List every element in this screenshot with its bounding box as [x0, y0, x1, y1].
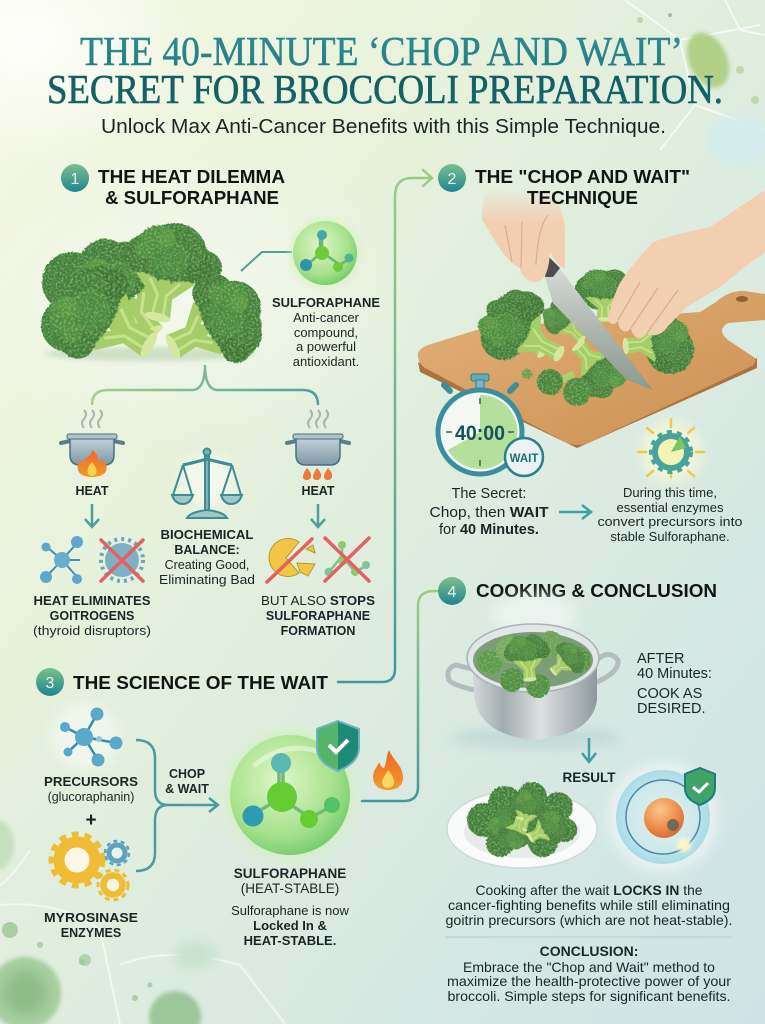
text: myrosinase enzymes: MYROSINASE	[44, 911, 138, 925]
heading 4	[438, 577, 717, 605]
heading 2: 2	[448, 171, 457, 188]
text: the secret: The Secret:	[452, 486, 526, 502]
knife	[545, 256, 653, 390]
panel: heat dilemma	[33, 164, 380, 638]
text: precursors: PRECURSORS	[44, 775, 138, 789]
text: the secret: Chop, then WAIT	[430, 505, 549, 521]
heading 1: & SULFORAPHANE	[105, 188, 279, 208]
plate of broccoli	[447, 782, 597, 868]
arrow: heat to goitrogens	[85, 504, 99, 527]
text: heat eliminates goitrogens	[33, 594, 151, 638]
icon: enzyme gears	[51, 834, 129, 900]
text: enzymes convert	[598, 485, 742, 544]
text: after 40 minutes: COOK AS	[637, 686, 702, 702]
text: sulforaphane heat-stable: HEAT-STABLE.	[244, 933, 336, 948]
text: sulforaphane heat-stable: SULFORAPHANE	[234, 866, 346, 881]
title	[47, 28, 723, 112]
chopped broccoli	[469, 270, 694, 408]
text: sulforaphane definition	[272, 296, 380, 369]
icon: precursor molecule	[51, 703, 122, 771]
text: conclusion: broccoli. Simple steps for significant benefits.	[448, 988, 730, 1004]
label: heat right: HEAT	[301, 484, 335, 498]
text: sulforaphane definition: compound,	[294, 325, 358, 340]
text: sulforaphane definition: Anti-cancer	[293, 310, 360, 325]
icon: crossed-out molecule	[324, 538, 370, 581]
text: sulforaphane heat-stable: Locked In &	[253, 918, 327, 933]
text: heat eliminates goitrogens: (thyroid disruptors)	[33, 624, 151, 638]
text: myrosinase enzymes: ENZYMES	[61, 926, 121, 940]
icon: protected cell	[608, 762, 718, 872]
bracket: combine arrow	[136, 740, 218, 871]
text: after 40 minutes: 40 Minutes:	[637, 666, 712, 682]
icon: crossed-out virus	[101, 539, 143, 581]
text: precursors	[44, 775, 138, 804]
text: biochemical balance: BALANCE:	[174, 543, 240, 557]
icon: sulforaphane sphere	[285, 213, 365, 293]
text: enzymes convert: During this time,	[623, 485, 717, 500]
icon: crossed-out enzyme	[267, 538, 315, 582]
icon: goitrogen molecule	[40, 536, 83, 584]
text: locks in: goitrin precursors (which are not heat-stable).	[446, 912, 732, 928]
heading 3: 3	[46, 675, 55, 692]
arrow: heat to stops	[311, 504, 325, 527]
heading 4: COOKING & CONCLUSION	[476, 581, 717, 601]
heading 2: TECHNIQUE	[527, 188, 638, 208]
icon: stopwatch	[438, 374, 543, 476]
label: chop and wait	[165, 767, 209, 796]
left hand	[482, 188, 565, 282]
heading 2: THE "CHOP AND WAIT"	[475, 167, 690, 187]
text: the secret: for 40 Minutes.	[439, 522, 539, 538]
text: sulforaphane heat-stable: Sulforaphane is now	[231, 903, 350, 918]
arrow: section 3 to section 4	[362, 591, 440, 801]
label: heat left: HEAT	[75, 484, 109, 498]
plus sign: +	[85, 810, 97, 831]
icon: stopwatch: 40:00	[455, 422, 505, 445]
heading 1: THE HEAT DILEMMA	[98, 167, 285, 187]
arrow: pot to result	[582, 738, 596, 762]
heading 2	[438, 164, 690, 208]
panel: chop and wait technique	[418, 164, 765, 544]
text: biochemical balance	[159, 528, 255, 587]
text: conclusion: maximize the health-protective power of your	[447, 973, 731, 989]
icon: flame	[373, 750, 403, 790]
subtitle: Unlock Max Anti-Cancer Benefits with this Simple Technique.	[101, 115, 666, 138]
text: stops sulforaphane formation	[261, 594, 375, 638]
panel: science of the wait	[36, 668, 403, 948]
text: biochemical balance: Creating Good,	[165, 558, 249, 572]
text: heat eliminates goitrogens: HEAT ELIMINATES	[34, 594, 150, 608]
text: conclusion	[447, 943, 731, 1004]
panel: cooking and conclusion	[438, 577, 732, 1004]
text: enzymes convert: essential enzymes	[617, 500, 724, 515]
label: chop and wait: CHOP	[169, 767, 205, 781]
text: stops sulforaphane formation: BUT ALSO STOPS	[261, 594, 375, 608]
arrow: secret to enzymes	[559, 505, 591, 519]
icon: pot with small flames	[287, 410, 349, 480]
icon: cell shield	[685, 768, 715, 805]
text: sulforaphane heat-stable	[231, 866, 350, 948]
label: result: RESULT	[562, 770, 616, 785]
icon: stopwatch: WAIT	[510, 453, 538, 465]
text: sulforaphane heat-stable: (HEAT-STABLE)	[241, 881, 339, 896]
arrow: section 3 to section 2	[338, 170, 432, 682]
heading 1: 1	[71, 171, 80, 188]
text: stops sulforaphane formation: FORMATION	[281, 624, 355, 638]
icon: activated gear	[638, 419, 704, 482]
text: enzymes convert: stable Sulforaphane.	[610, 529, 730, 544]
icon: balance scale	[172, 448, 242, 518]
broccoli trio	[34, 219, 274, 390]
text: enzymes convert: convert precursors into	[598, 514, 742, 529]
text: heat eliminates goitrogens: GOITROGENS	[50, 609, 134, 623]
text: biochemical balance: Eliminating Bad	[159, 573, 255, 587]
text: sulforaphane definition: SULFORAPHANE	[272, 296, 380, 310]
heading 1	[61, 164, 285, 208]
text: sulforaphane definition: antioxidant.	[293, 354, 359, 369]
text: after 40 minutes	[637, 651, 712, 717]
title: THE 40-MINUTE ‘CHOP AND WAIT’	[80, 28, 683, 74]
heading 4: 4	[448, 584, 457, 601]
bracket: heat split	[92, 365, 318, 405]
steam	[493, 593, 577, 637]
text: biochemical balance: BIOCHEMICAL	[160, 528, 254, 542]
icon: heat-stable sulforaphane sphere	[216, 721, 364, 869]
heading 3	[36, 668, 328, 696]
cutting board	[418, 291, 765, 448]
label: chop and wait: & WAIT	[165, 782, 209, 796]
text: locks in: Cooking after the wait LOCKS IN the	[476, 882, 703, 898]
text: sulforaphane definition: a powerful	[296, 339, 356, 354]
text: precursors: (glucoraphanin)	[48, 790, 134, 804]
text: conclusion: Embrace the "Chop and Wait" method to	[463, 959, 715, 975]
cooking pot with broccoli	[448, 624, 620, 748]
divider	[445, 936, 732, 938]
heading 3: THE SCIENCE OF THE WAIT	[73, 673, 328, 693]
text: locks in	[446, 882, 732, 928]
text: myrosinase enzymes	[44, 911, 138, 940]
right hand	[608, 190, 765, 338]
text: locks in: cancer-fighting benefits while still eliminating	[448, 897, 730, 913]
text: conclusion: CONCLUSION:	[540, 943, 638, 959]
text: after 40 minutes: DESIRED.	[637, 701, 706, 717]
text: after 40 minutes: AFTER	[637, 651, 685, 667]
connector: broccoli to molecule	[241, 252, 292, 271]
text: the secret	[430, 486, 549, 538]
icon: shield check	[317, 721, 359, 771]
icon: pot with large flame	[61, 410, 123, 477]
text: stops sulforaphane formation: SULFORAPHANE	[266, 609, 370, 623]
